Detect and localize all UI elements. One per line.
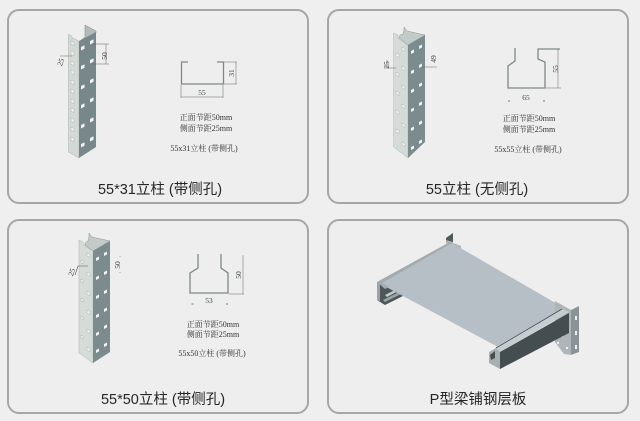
heading: 55*31立柱 (带侧孔) [98,181,222,198]
icon: 55*31 column drawing: 25 [55,57,66,67]
icon: 55 section: 65 [522,93,530,102]
spec text: 侧面节距25mm [187,329,240,339]
icon: 55 column drawing: 49 [429,55,438,63]
spec text: 侧面节距25mm [180,123,233,133]
spec text: 55x50立柱 (带侧孔) [178,348,246,358]
heading: P型梁铺钢层板 [430,390,527,408]
icon: shelf assembly [377,233,579,369]
icon: 55*31 column drawing: 50 [100,52,109,60]
icon: 55 section: 55 [551,65,560,73]
back upright [446,233,461,251]
icon: 55*50 section [190,254,244,305]
icon: 55*50 section: 50 [234,271,243,279]
spec text: 55x31立柱 (带侧孔) [170,143,238,153]
icon: 55 column drawing: 25 [382,61,391,69]
icon: 55*31 section: 55 [198,88,206,97]
spec text: 正面节距50mm [187,319,240,329]
spec text [170,112,238,153]
far beam end [377,282,405,305]
icon: 55*50 column drawing: 50 [113,261,122,269]
icon: 55*31 column drawing [55,25,109,158]
icon: 55 section [508,48,561,102]
heading: 55立柱 (无侧孔) [426,181,528,198]
spec text: 侧面节距25mm [503,124,556,134]
icon: 55*50 section: 53 [205,296,213,305]
spec text: 正面节距50mm [503,113,556,123]
near upright plate [555,301,571,355]
panel: P-beam steel deck [328,220,628,413]
icon: 55*31 section [181,62,237,98]
spec text [178,319,246,358]
icon: 55*50 column drawing: 25 [66,267,77,277]
heading: 55*50立柱 (带侧孔) [101,391,225,408]
panel: 55*31 column [8,10,308,203]
panel: 55*50 column [8,220,308,413]
icon: 55*50 column drawing [66,233,122,363]
spec text: 正面节距50mm [180,112,233,122]
icon: 55 column drawing [382,27,438,158]
spec text: 55x55立柱 (带侧孔) [494,144,562,154]
icon: 55*31 section: 31 [227,69,236,77]
spec text [494,113,562,154]
near beam [496,309,569,352]
panel: 55 column [328,10,628,203]
deck top [377,242,566,347]
